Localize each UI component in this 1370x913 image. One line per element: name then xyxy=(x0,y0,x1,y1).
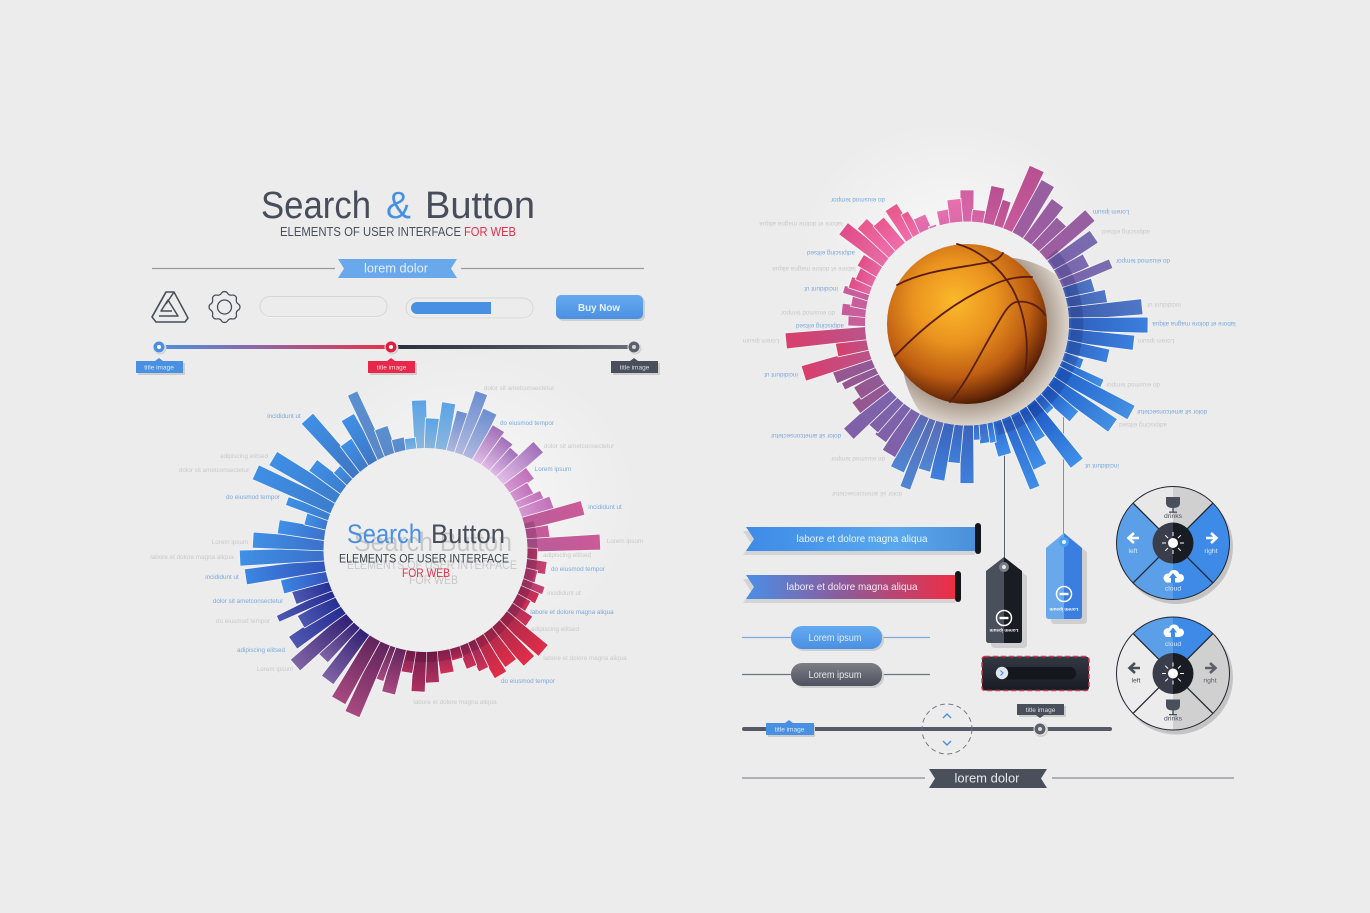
pill button: gray xyxy=(742,663,930,688)
hanging tag: dark xyxy=(986,557,1027,648)
left chart labels: labore et dolore magna aliqua xyxy=(413,699,497,706)
slider with dashed selector xyxy=(742,704,1112,754)
title: & xyxy=(386,185,411,227)
left chart labels: adipiscing elitsed xyxy=(220,453,268,460)
icon: drinks xyxy=(1166,700,1180,715)
left chart labels: incididunt ut xyxy=(588,504,622,511)
left chart labels: dolor sit ametconsectetur xyxy=(484,385,554,392)
tag: slider blue title image: title image xyxy=(775,726,805,734)
left chart labels: adipiscing elitsed xyxy=(531,626,579,633)
wheel menu: bottom: drinks xyxy=(1164,716,1183,722)
right chart labels (upside down) xyxy=(743,196,1236,497)
right chart labels (upside down): do eiusmod tempor xyxy=(1116,257,1170,264)
centre ghost title: ELEMENTS OF USER INTERFACE xyxy=(347,558,517,572)
ribbon: blue: labore et dolore magna aliqua xyxy=(796,533,928,545)
tag: slider dark title image: title image xyxy=(1026,707,1056,714)
icon: drinks xyxy=(1166,497,1180,513)
basketball with ring and shadow xyxy=(865,222,1069,426)
left chart labels: Lorem ipsum xyxy=(607,538,643,545)
wheel menu: top: right xyxy=(1204,548,1218,555)
tag: slider dark title image xyxy=(1017,704,1066,718)
dark toggle switch xyxy=(982,656,1089,690)
ribbon: blue to red xyxy=(743,571,961,603)
left chart labels: do eiusmod tempor xyxy=(501,678,555,685)
section divider: dark lorem dolor ribbon xyxy=(742,769,1234,788)
left chart labels: incididunt ut xyxy=(547,590,581,597)
centre ghost title xyxy=(347,527,517,587)
tag: blue title image xyxy=(136,358,185,375)
centre ghost title: FOR WEB xyxy=(409,573,458,587)
right chart labels (upside down): Lorem ipsum xyxy=(1093,208,1129,215)
icon: gear xyxy=(208,291,241,323)
wheel menu: top: cloud xyxy=(1165,586,1181,592)
right chart labels (upside down): do eiusmod tempor xyxy=(781,309,835,316)
icon: cloud xyxy=(1164,624,1184,638)
centre title: FOR WEB xyxy=(402,566,450,580)
icon: left arrow xyxy=(1130,663,1140,673)
centre title xyxy=(339,519,509,580)
wheel menu: top: drinks xyxy=(1164,513,1183,520)
wheel menu: top: left xyxy=(1128,548,1138,555)
icon: right arrow xyxy=(1206,533,1216,543)
left chart labels: labore et dolore magna aliqua xyxy=(543,655,627,662)
left chart labels: Lorem ipsum xyxy=(257,666,293,673)
right chart labels (upside down): do eiusmod tempor xyxy=(831,196,885,203)
right chart labels (upside down): dolor sit ametconsectetur xyxy=(832,490,902,497)
left chart labels: do eiusmod tempor xyxy=(226,494,280,501)
left chart labels: adipiscing elitsed xyxy=(543,552,591,559)
left chart labels: dolor sit ametconsectetur xyxy=(544,443,614,450)
left chart labels: Lorem ipsum xyxy=(535,466,571,473)
title: Search xyxy=(261,185,371,227)
section divider: lorem dolor ribbon: lorem dolor xyxy=(364,262,428,276)
subtitle: ELEMENTS OF USER INTERFACE xyxy=(280,224,461,239)
wheel hub xyxy=(1153,653,1193,694)
icon: impossible triangle xyxy=(152,292,188,322)
left chart labels: labore et dolore magna aliqua xyxy=(530,609,614,616)
left chart labels: labore et dolore magna aliqua xyxy=(150,554,234,561)
search input xyxy=(260,296,387,318)
title: Button xyxy=(425,185,535,227)
right chart labels (upside down): incididunt ut xyxy=(1085,462,1119,469)
right chart labels (upside down): adipiscing elitsed xyxy=(1102,228,1150,235)
centre ghost title: Search Button xyxy=(354,527,512,557)
right chart labels (upside down): labore et dolore magna aliqua xyxy=(1152,320,1236,327)
section divider: lorem dolor ribbon xyxy=(152,259,644,278)
subtitle: FOR WEB xyxy=(464,224,516,239)
right chart labels (upside down): dolor sit ametconsectetur xyxy=(1137,408,1207,415)
glow behind left chart xyxy=(300,350,640,650)
centre title: Search xyxy=(347,519,422,549)
glow behind right chart xyxy=(800,120,1100,360)
buy now button xyxy=(556,295,645,321)
left chart labels: dolor sit ametconsectetur xyxy=(213,598,283,605)
icon: cloud xyxy=(1164,570,1184,583)
right chart labels (upside down): Lorem ipsum xyxy=(1138,337,1174,344)
wheel menu: bottom xyxy=(1116,616,1233,734)
icon: left arrow xyxy=(1128,533,1139,543)
pill button: blue: Lorem ipsum xyxy=(808,633,862,644)
centre title: Button xyxy=(431,519,505,549)
right chart labels (upside down): do eiusmod tempor xyxy=(831,455,885,462)
hanging tag: blue: Lorem ipsum xyxy=(1050,607,1078,612)
radial bar chart: right xyxy=(785,165,1148,490)
centre title: ELEMENTS OF USER INTERFACE xyxy=(339,552,509,566)
tag: red title image xyxy=(368,358,417,375)
wheel menu: bottom: right xyxy=(1203,678,1217,684)
left chart labels: do eiusmod tempor xyxy=(216,618,270,625)
left chart labels: incididunt ut xyxy=(205,574,239,581)
right chart labels (upside down): adipiscing elitsed xyxy=(807,249,855,256)
hanging tag strings xyxy=(1004,415,1064,558)
right chart labels (upside down): do eiusmod tempor xyxy=(1106,381,1160,388)
hanging tag: blue xyxy=(1046,533,1087,624)
wheel hub xyxy=(1153,522,1193,564)
step slider xyxy=(136,341,660,375)
wheel menu: bottom: cloud xyxy=(1165,641,1181,648)
left chart labels: do eiusmod tempor xyxy=(551,566,605,573)
left chart labels: dolor sit ametconsectetur xyxy=(179,467,249,474)
right chart labels (upside down): labore et dolore magna aliqua xyxy=(759,220,843,227)
right chart labels (upside down): Lorem ipsum xyxy=(743,337,779,344)
right chart labels (upside down): labore et dolore magna aliqua xyxy=(772,265,856,272)
ribbon: blue to red: labore et dolore magna aliqua xyxy=(786,581,918,593)
right chart labels (upside down): incididunt ut xyxy=(764,371,798,378)
left chart labels xyxy=(150,385,643,706)
tag: dark title image: title image xyxy=(620,364,650,372)
left chart labels: adipiscing elitsed xyxy=(237,647,285,654)
right chart labels (upside down): adipiscing elitsed xyxy=(796,322,844,329)
tag: blue title image: title image xyxy=(144,364,174,372)
left chart centre disc xyxy=(324,448,528,652)
right chart labels (upside down): incididunt ut xyxy=(804,285,838,292)
tag: red title image: title image xyxy=(377,364,407,372)
right chart labels (upside down): dolor sit ametconsectetur xyxy=(771,432,841,439)
right chart labels (upside down): adipiscing elitsed xyxy=(1119,421,1167,428)
right chart labels (upside down): incididunt ut xyxy=(1147,301,1181,308)
wheel menu: top xyxy=(1116,486,1233,604)
hanging tag: dark: Lorem ipsum xyxy=(990,628,1018,633)
tag: slider blue title image xyxy=(766,720,815,737)
ribbon: blue xyxy=(743,523,981,555)
progress bar xyxy=(406,298,533,319)
wheel menu: bottom: left xyxy=(1131,678,1141,684)
pill button: gray: Lorem ipsum xyxy=(808,670,862,681)
section divider: dark lorem dolor ribbon: lorem dolor xyxy=(954,772,1020,786)
buy now button: Buy Now xyxy=(578,302,621,314)
radial bar chart: left xyxy=(239,390,601,718)
pill button: blue xyxy=(742,626,930,651)
title xyxy=(261,185,535,227)
left chart labels: Lorem ipsum xyxy=(212,539,248,546)
tag: dark title image xyxy=(611,358,660,375)
left chart labels: incididunt ut xyxy=(267,413,301,420)
left chart labels: do eiusmod tempor xyxy=(500,420,554,427)
icon: right arrow xyxy=(1205,663,1216,673)
